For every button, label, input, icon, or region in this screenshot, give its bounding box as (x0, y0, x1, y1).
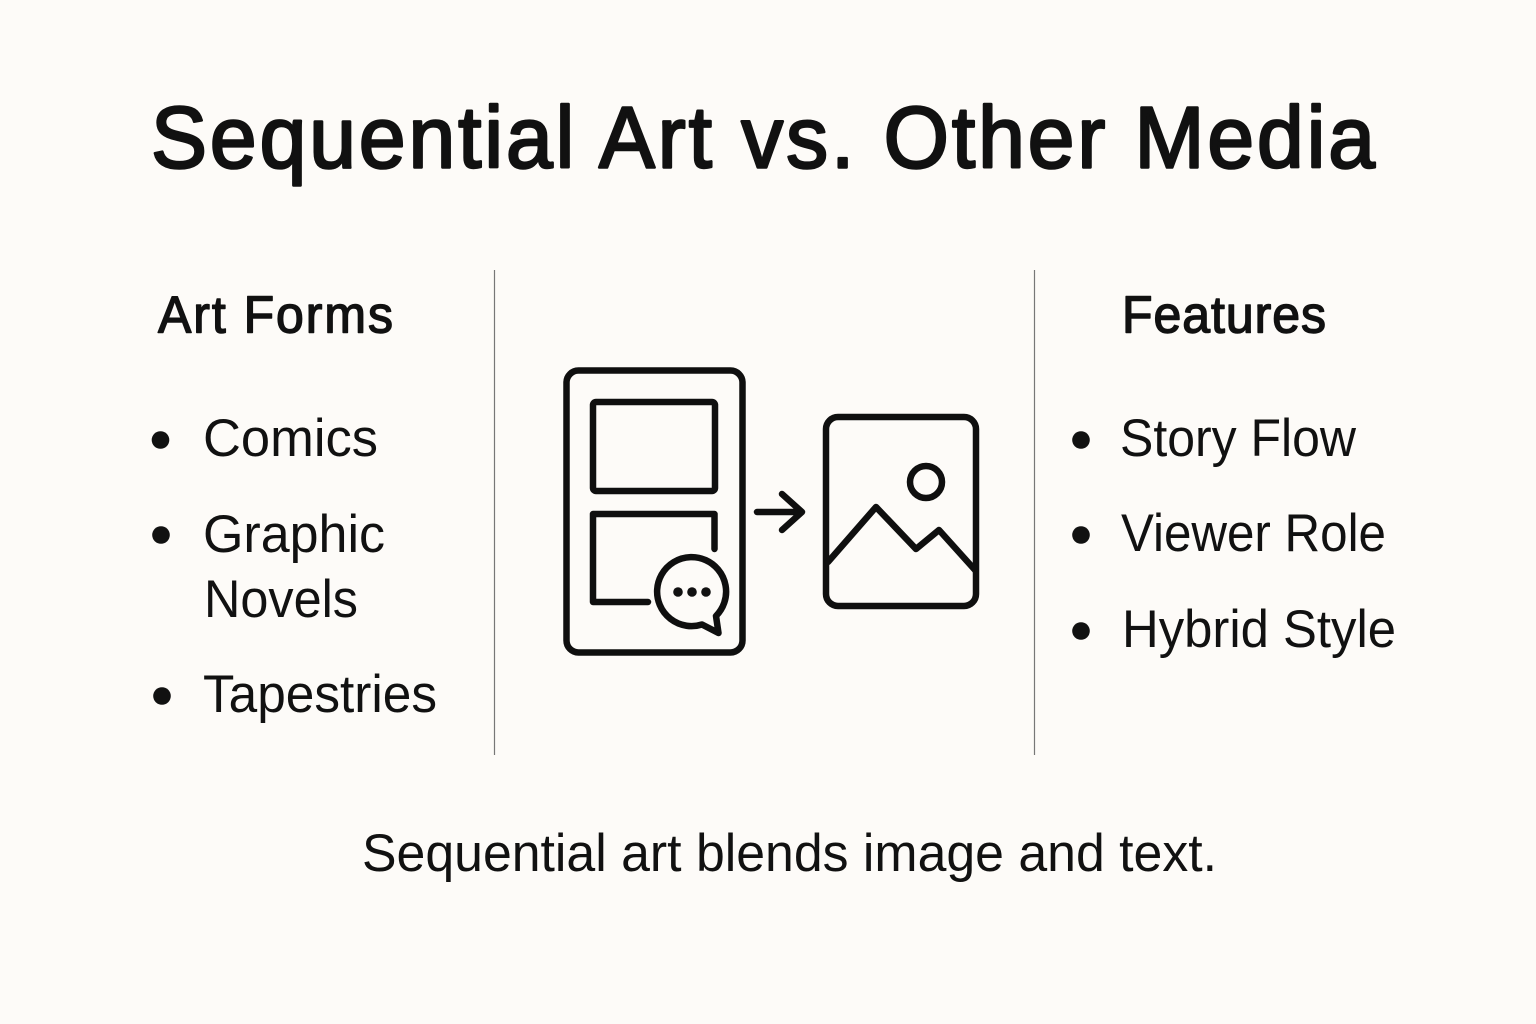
icon: comic page with panels and speech bubble (566, 370, 742, 652)
heading: features: Features (1122, 286, 1326, 344)
title: Sequential Art vs. Other Media (151, 89, 1375, 187)
list item: comics: Comics (203, 409, 378, 468)
caption: Sequential art blends image and text. (362, 824, 1217, 883)
icon: arrow (757, 494, 802, 530)
panel: features (1072, 286, 1396, 659)
heading: art forms: Art Forms (158, 286, 393, 344)
list item: graphic novels: Novels (204, 570, 358, 629)
list item: graphic novels: Graphic (203, 505, 385, 564)
panel: art forms (152, 286, 437, 724)
list item: hybrid style: Hybrid Style (1122, 600, 1396, 659)
icon: landscape image (826, 417, 976, 606)
list item: story flow: Story Flow (1120, 409, 1357, 468)
list item: viewer role: Viewer Role (1121, 504, 1386, 563)
list item: graphic novels (152, 505, 385, 629)
list item: tapestries: Tapestries (203, 665, 437, 724)
